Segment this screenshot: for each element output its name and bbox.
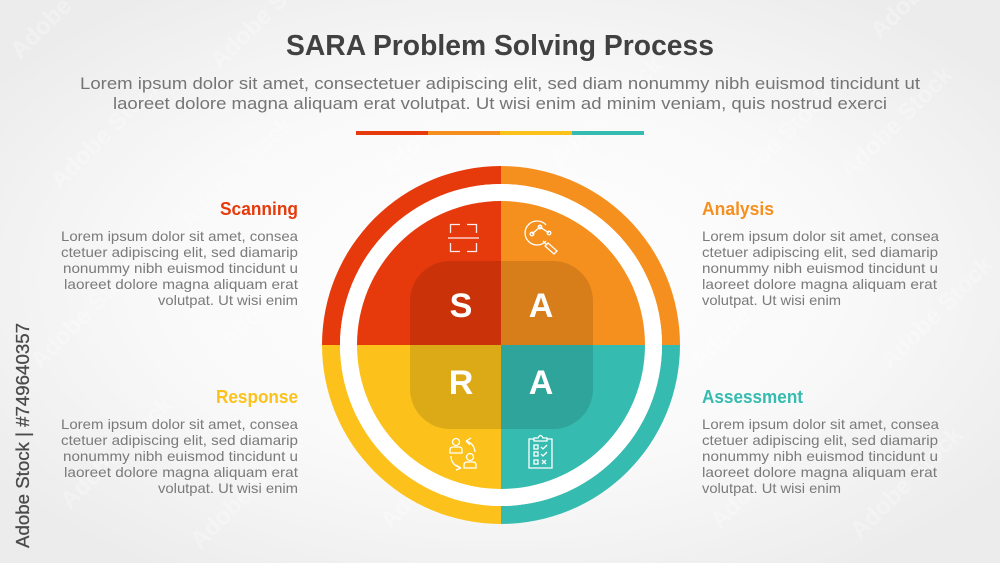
heading: Assessment: Assessment bbox=[702, 387, 803, 407]
title: SARA Problem Solving Process bbox=[286, 30, 714, 62]
text: Adobe Stock bbox=[545, 51, 668, 174]
text: Adobe Stock bbox=[705, 411, 828, 534]
letter A: A bbox=[529, 287, 553, 325]
text block: Analysis bbox=[702, 199, 939, 308]
text: Adobe Stock bbox=[375, 61, 498, 184]
body: Scanning: laoreet dolore magna aliquam erat bbox=[64, 276, 298, 292]
text: Adobe Stock bbox=[55, 391, 178, 514]
text: Adobe Stock bbox=[685, 251, 808, 374]
letter R: R bbox=[449, 364, 473, 402]
body: Scanning bbox=[61, 228, 298, 308]
body: Response: volutpat. Ut wisi enim bbox=[158, 480, 298, 496]
icon: people exchange bbox=[450, 438, 476, 470]
heading: Response: Response bbox=[216, 387, 298, 407]
text: Adobe Stock bbox=[845, 421, 968, 544]
body: Scanning: ctetuer adipiscing elit, sed diamarip bbox=[61, 244, 298, 260]
stock credit: Adobe Stock | #749640357 bbox=[13, 323, 33, 548]
text: Adobe Stock bbox=[715, 81, 838, 204]
text: Adobe Stock bbox=[175, 111, 298, 234]
body: Assessment: volutpat. Ut wisi enim bbox=[702, 480, 841, 496]
body: Scanning: nonummy nibh euismod tincidunt u bbox=[63, 260, 298, 276]
body: Assessment bbox=[702, 416, 939, 496]
SARA circle diagram bbox=[322, 166, 680, 524]
quadrant: Assessment bbox=[501, 345, 645, 489]
body: Scanning: Lorem ipsum dolor sit amet, consea bbox=[61, 228, 298, 244]
body: Response bbox=[61, 416, 298, 496]
icon: magnifier with nodes bbox=[525, 221, 557, 254]
outer ring segments bbox=[322, 166, 680, 524]
body: Analysis: ctetuer adipiscing elit, sed diamarip bbox=[702, 244, 938, 260]
body: Analysis: laoreet dolore magna aliquam erat bbox=[702, 276, 937, 292]
centre rounded square bbox=[410, 261, 593, 429]
heading: Scanning: Scanning bbox=[220, 199, 298, 219]
heading: Analysis: Analysis bbox=[702, 199, 774, 219]
body: Assessment: Lorem ipsum dolor sit amet, consea bbox=[702, 416, 939, 432]
letter S: S bbox=[450, 287, 472, 325]
body: Assessment: ctetuer adipiscing elit, sed diamarip bbox=[702, 432, 938, 448]
letter A: A bbox=[529, 364, 553, 402]
body: Response: ctetuer adipiscing elit, sed diamarip bbox=[61, 432, 298, 448]
text: Adobe Stock bbox=[835, 61, 958, 184]
colour divider bar bbox=[356, 131, 644, 135]
text: Adobe Stock bbox=[25, 251, 148, 374]
text: Adobe Stock bbox=[215, 231, 338, 354]
text block: Response bbox=[61, 387, 298, 496]
body: Response: laoreet dolore magna aliquam erat bbox=[64, 464, 298, 480]
text block: Assessment bbox=[702, 387, 939, 496]
body: Analysis: Lorem ipsum dolor sit amet, consea bbox=[702, 228, 939, 244]
body: Analysis: volutpat. Ut wisi enim bbox=[702, 292, 841, 308]
subtitle text block bbox=[80, 74, 920, 113]
text: Adobe Stock bbox=[45, 71, 168, 194]
subtitle text block: Lorem ipsum dolor sit amet, consectetuer adipiscing elit, sed diam nonummy nibh euismod tincidunt ut bbox=[80, 74, 920, 93]
text: Adobe Stock bbox=[875, 251, 998, 374]
icon: checklist clipboard bbox=[529, 436, 552, 468]
text: Adobe Stock bbox=[375, 411, 498, 534]
body: Assessment: nonummy nibh euismod tincidunt u bbox=[702, 448, 938, 464]
text block: Scanning bbox=[61, 199, 298, 308]
body: Scanning: volutpat. Ut wisi enim bbox=[158, 292, 298, 308]
quadrant: Scanning bbox=[357, 201, 501, 345]
body: Response: nonummy nibh euismod tincidunt u bbox=[63, 448, 298, 464]
body: Assessment: laoreet dolore magna aliquam erat bbox=[702, 464, 937, 480]
quadrant: Analysis bbox=[501, 201, 645, 345]
body: Analysis: nonummy nibh euismod tincidunt u bbox=[702, 260, 938, 276]
subtitle text block: laoreet dolore magna aliquam erat volutpat. Ut wisi enim ad minim veniam, quis nostrud exerci bbox=[113, 94, 887, 113]
quadrant: Response bbox=[357, 345, 501, 489]
body: Analysis bbox=[702, 228, 939, 308]
icon: scan frame bbox=[448, 224, 479, 252]
body: Response: Lorem ipsum dolor sit amet, consea bbox=[61, 416, 298, 432]
text: Adobe Stock bbox=[185, 431, 308, 554]
white gap ring bbox=[340, 184, 662, 506]
